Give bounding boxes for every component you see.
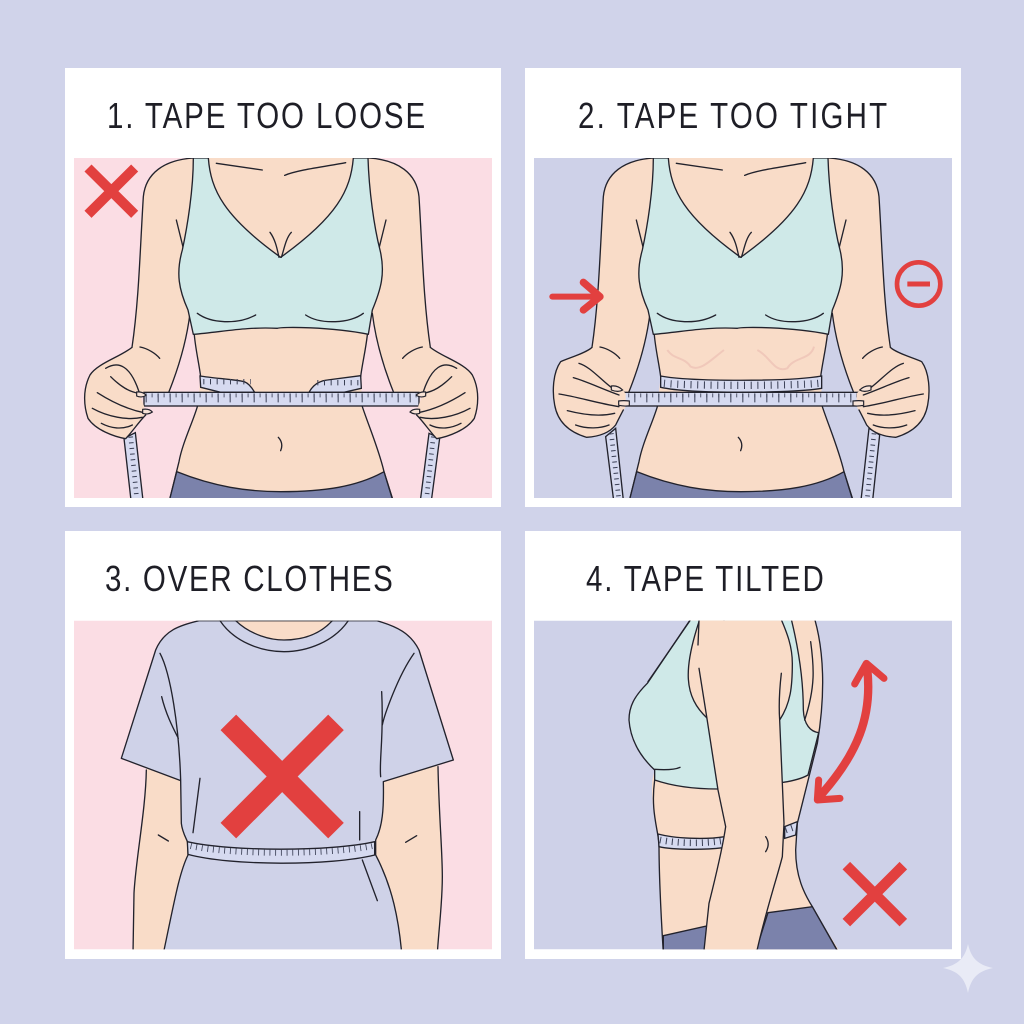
icon: red double arrow <box>817 663 884 800</box>
icon: minus circle <box>897 262 940 306</box>
arm side view <box>698 617 792 957</box>
skin wrinkles <box>667 347 814 369</box>
illustration: loose tape <box>74 158 492 503</box>
illustration: tape over t-shirt <box>74 621 492 957</box>
arms <box>133 763 442 953</box>
icon: red arrow <box>552 282 600 310</box>
heading: over clothes: 3. OVER CLOTHES <box>105 558 393 599</box>
icon: large red x <box>228 722 336 831</box>
hanging tape ends <box>606 428 880 503</box>
heading: tape too tight: 2. TAPE TOO TIGHT <box>578 95 887 136</box>
measuring tape <box>144 392 419 406</box>
t-shirt <box>121 621 453 957</box>
panel: 1. tape too loose <box>65 68 501 507</box>
panel: 2. tape too tight <box>525 68 961 507</box>
measuring tape <box>621 392 865 406</box>
panel: 3. over clothes <box>65 531 501 959</box>
heading: tape tilted: 4. TAPE TILTED <box>586 558 824 599</box>
sports bra side view <box>629 617 819 789</box>
icon: red x <box>846 866 903 923</box>
hanging tape ends <box>124 433 440 503</box>
measuring tape <box>658 822 797 849</box>
icon: red x <box>88 168 135 214</box>
leggings <box>662 906 838 950</box>
back of tape <box>661 376 822 392</box>
illustration: side view with tilted tape <box>534 617 952 957</box>
heading: tape too loose: 1. TAPE TOO LOOSE <box>107 95 425 136</box>
back of tape sagging <box>200 376 361 392</box>
illustration: tight tape <box>534 158 952 503</box>
torso side view <box>652 617 841 953</box>
measuring tape <box>187 842 375 863</box>
icon: sparkle <box>943 944 993 993</box>
panel: 4. tape tilted <box>525 531 961 959</box>
